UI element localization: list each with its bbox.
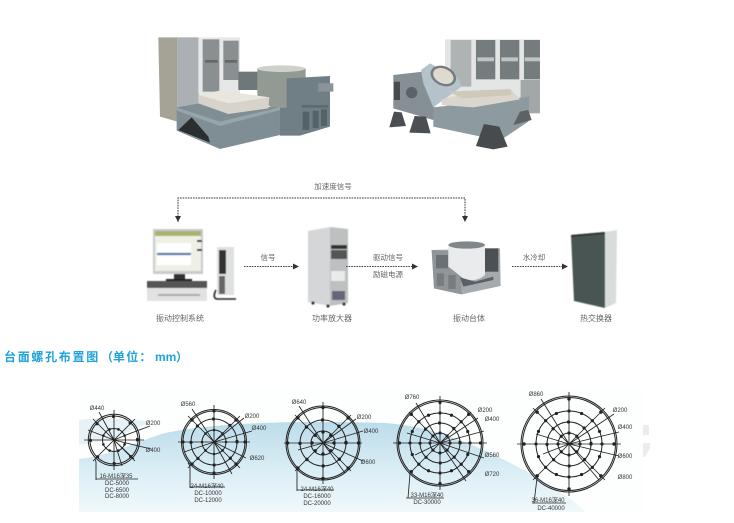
diagram: DC-5000 to DC-8000 table [84, 406, 161, 500]
diagram: DC-10000 and DC-12000 table: Ø560 [181, 402, 196, 408]
arrow: drive signal and excitation power [346, 264, 418, 270]
diagram: DC-16000 and DC-20000 table: DC-20000 [303, 501, 331, 507]
diagram: DC-10000 and DC-12000 table: Ø200 [245, 414, 260, 420]
diagram: DC-5000 to DC-8000 table: DC-8000 [105, 494, 130, 500]
diagram: DC-16000 and DC-20000 table: Ø400 [364, 429, 379, 435]
label: power amplifier: 功率放大器 [312, 313, 352, 323]
diagram: DC-30000 table: Ø560 [485, 453, 500, 459]
arrow: acceleration signal feedback [175, 198, 468, 222]
diagram: DC-40000 table: Ø600 [618, 454, 633, 460]
label: acceleration signal: 加速度信号 [314, 181, 352, 191]
label: vibration table body: 振动台体 [453, 313, 485, 323]
diagram: DC-16000 and DC-20000 table: Ø200 [357, 415, 372, 421]
diagram: DC-16000 and DC-20000 table: Ø640 [292, 400, 307, 406]
diagram: DC-10000 and DC-12000 table: Ø620 [250, 456, 265, 462]
diagram: DC-40000 table: Ø860 [529, 392, 544, 398]
arrow: signal [244, 264, 299, 270]
label: excitation power: 励磁电源 [373, 269, 403, 279]
diagram: DC-40000 table: 36-M16深40 [531, 496, 565, 504]
heading: mounting hole layout: 台面螺孔布置图 [4, 349, 100, 364]
diagram: DC-10000 and DC-12000 table: 24-M16深40 [190, 482, 224, 490]
diagram: DC-40000 table [517, 392, 633, 512]
diagram: DC-5000 to DC-8000 table: Ø200 [146, 421, 161, 427]
heading: mounting hole layout: 单位： [113, 349, 153, 364]
diagram: DC-40000 table: Ø800 [618, 475, 633, 481]
diagram: DC-10000 and DC-12000 table [178, 402, 267, 504]
diagram: DC-30000 table: Ø760 [405, 395, 420, 401]
diagram: DC-5000 to DC-8000 table: DC-6500 [105, 488, 130, 494]
diagram: DC-30000 table: 33-M16深40 [410, 491, 444, 499]
photo: right vibration test machine [389, 39, 540, 149]
diagram: DC-16000 and DC-20000 table: 24-M16深40 [300, 485, 334, 493]
diagram: DC-5000 to DC-8000 table: 16-M16深35 [99, 472, 133, 480]
icon: power amplifier [308, 227, 348, 308]
diagram: DC-10000 and DC-12000 table: DC-10000 [194, 491, 222, 497]
icon: vibration control system [147, 229, 236, 301]
diagram: DC-30000 table: DC-30000 [413, 500, 441, 506]
diagram: DC-10000 and DC-12000 table: Ø400 [252, 426, 267, 432]
diagram: DC-16000 and DC-20000 table [284, 400, 379, 507]
diagram: DC-5000 to DC-8000 table: Ø440 [90, 406, 105, 412]
diagram: DC-16000 and DC-20000 table: Ø600 [361, 460, 376, 466]
panel: hole layout background [79, 389, 650, 512]
icon: heat exchanger [571, 230, 617, 308]
heading: mounting hole layout: ） [176, 350, 188, 364]
diagram: DC-5000 to DC-8000 table: DC-5000 [105, 481, 130, 487]
label: signal: 信号 [260, 252, 276, 262]
label: heat exchanger: 热交换器 [580, 313, 612, 323]
diagram: DC-30000 table: Ø720 [485, 472, 500, 478]
heading: mounting hole layout: （ [101, 350, 113, 364]
label: vibration control system: 振动控制系统 [156, 313, 204, 323]
flow diagram [147, 181, 617, 323]
diagram: DC-10000 and DC-12000 table: DC-12000 [194, 498, 222, 504]
diagram: DC-40000 table: Ø400 [618, 425, 633, 431]
diagram: DC-30000 table: Ø200 [478, 408, 493, 414]
label: drive signal: 驱动信号 [373, 252, 403, 262]
label: water cooling: 水冷却 [523, 252, 545, 262]
icon: vibration table body [432, 241, 501, 294]
arrow: water cooling [512, 264, 568, 270]
heading: mounting hole layout: mm [155, 350, 176, 364]
diagram: DC-30000 table: Ø400 [485, 417, 500, 423]
diagram: DC-30000 table [393, 395, 500, 506]
diagram: DC-40000 table: Ø200 [613, 408, 628, 414]
diagram: DC-40000 table: DC-40000 [537, 506, 565, 512]
diagram: DC-5000 to DC-8000 table: Ø400 [146, 448, 161, 454]
diagram: DC-16000 and DC-20000 table: DC-16000 [303, 494, 331, 500]
photo: left vibration test machine [158, 37, 333, 149]
